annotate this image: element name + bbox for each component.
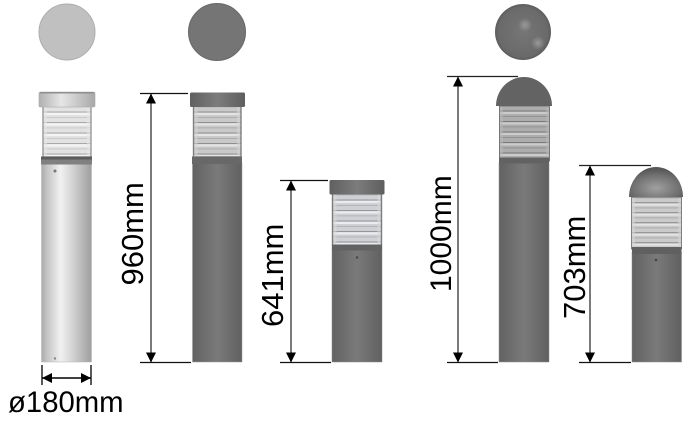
top view: light disc [39,4,95,60]
dimension: 1000mm: 1000mm [425,175,458,292]
bollard 2: dark flat cap [190,92,245,362]
bollard 5: short dome [629,167,683,362]
dimension: 641mm: 641mm [255,224,290,327]
bollard 3: short dark flat cap [330,180,384,362]
top view: dark sphere [495,4,551,60]
dimension: 703mm: 703mm [557,216,592,319]
dimension: diameter 180mm [8,365,124,419]
top view: dark disc [188,4,246,60]
bollard 1: silver flat cap [39,92,95,362]
dimension: 960mm: 960mm [115,182,150,286]
dimension: diameter 180mm: ø180mm [8,386,124,419]
bollard 4: tall dome [496,77,552,362]
